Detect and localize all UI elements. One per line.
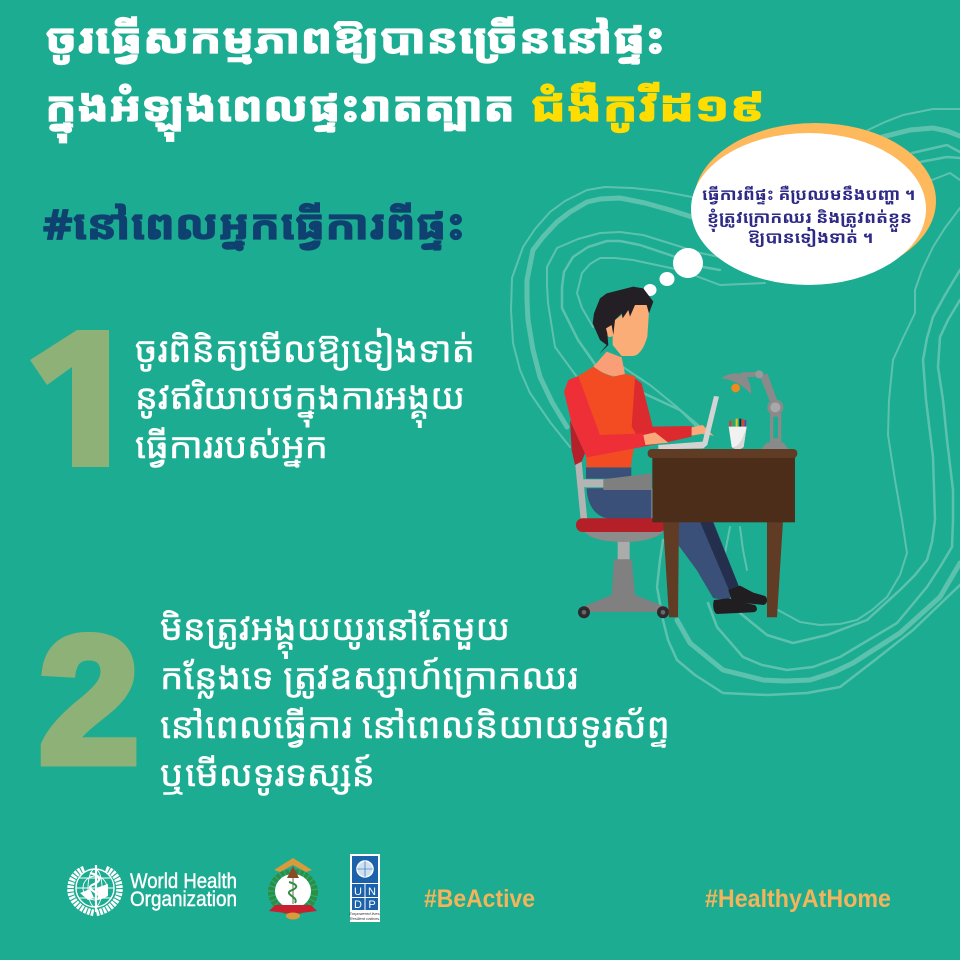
tip 2 text: នៅពេលធ្វើការ នៅពេលនិយាយទូរស័ព្ទ [160,702,670,749]
logo: UNDP: D [354,899,362,911]
heading: when working from home: #នៅពេលអ្នកធ្វើការពីផ្ទះ [43,196,465,252]
illustration: person working at desk [564,287,797,618]
hashtag: BeActive: #BeActive [424,885,535,913]
title: ចូរធ្វើសកម្មភាពឱ្យបានច្រើននៅផ្ទះ [45,10,665,66]
torso [578,367,637,467]
logo: UNDP [349,854,381,922]
tip 2 text: កន្លែងទេ ត្រូវឧស្សាហ៍ក្រោកឈរ [160,653,578,700]
trousers [586,467,739,600]
logo: World Health Organization: Organization [130,888,237,911]
tip 2 text: មិនត្រូវអង្គុយយូរនៅតែមួយ [160,604,510,659]
number 2: 2 [39,600,139,801]
chair [575,462,669,618]
laptop [658,396,719,449]
logo: UNDP: Empowered lives. [349,911,381,916]
title: ក្នុងអំឡុងពេលផ្ទះរាតត្បាត [45,78,515,144]
shoes [713,586,767,614]
title [45,10,765,144]
thought bubble [644,123,936,296]
far arm [632,378,692,447]
tip 2 text: ឬមើលទូរទស្សន៍ [160,750,375,797]
logo: World Health Organization [71,865,237,913]
seat [576,518,666,532]
hashtag: HealthyAtHome: #HealthyAtHome [705,885,891,913]
tip 1 text [135,326,475,469]
hands [643,425,714,445]
thought bubble: ធ្វើការពីផ្ទះ គឺប្រឈមនឹងបញ្ហា ។ [702,182,915,205]
head [593,287,653,356]
near arm [564,376,644,457]
tip 2 text [160,604,670,797]
logo: UNDP: P [368,899,376,911]
tip 1 text: ធ្វើការរបស់អ្នក [135,422,328,469]
desk lamp [722,370,789,450]
thought bubble: ខ្ញុំត្រូវក្រោកឈរ និងត្រូវពត់ខ្លួន [707,205,912,233]
thought bubble: ឱ្យបានទៀងទាត់ ។ [748,225,873,248]
tip 1 text: ចូរពិនិត្យមើលឱ្យទៀងទាត់ [135,326,475,373]
logo: UNDP: U [354,886,362,898]
logo: World Health Organization: World Health [130,870,237,893]
number 1: 1 [28,291,136,508]
title: ជំងឺកូវីដ១៩ [530,78,765,134]
tip 1 text: នូវឥរិយាបថក្នុងការអង្គុយ [135,373,465,428]
desk [648,449,797,617]
logo: UNDP: Resilient nations. [350,916,380,921]
pen cup [729,419,747,449]
neck [593,352,625,376]
logo: Ministry of Health Cambodia [269,858,317,920]
logo: UNDP: N [368,886,376,898]
back sleeve [570,420,585,465]
